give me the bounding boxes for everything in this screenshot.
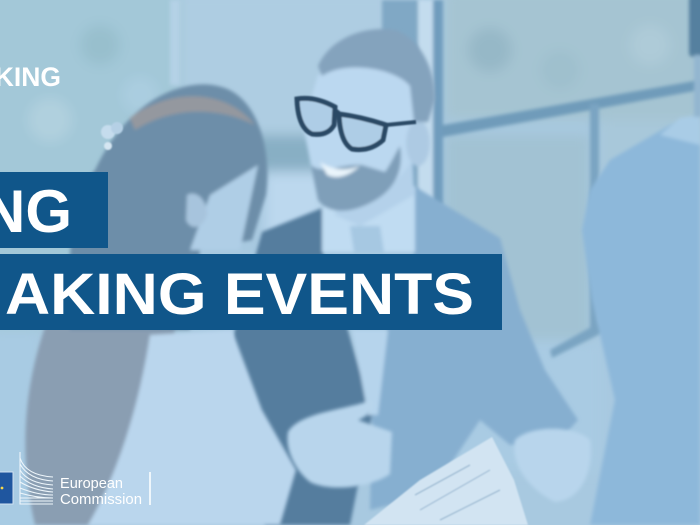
man's light jacket side (370, 186, 578, 510)
logo text: European (60, 476, 123, 492)
woman's long lower hair (25, 260, 175, 525)
ear (406, 120, 430, 166)
document held in hands (364, 437, 528, 525)
glasses (297, 98, 416, 150)
woman's blouse (88, 330, 296, 525)
person: smiling man in suit (232, 29, 591, 525)
logo: Commission building (20, 452, 53, 504)
woman's ear and neck (190, 165, 258, 250)
man's hands (287, 400, 591, 502)
heading block: line one (0, 172, 108, 248)
logo text: Commission (60, 492, 142, 508)
smile (320, 162, 360, 177)
woman's hair (69, 84, 267, 330)
logo text (60, 476, 142, 508)
man's shirt (322, 186, 415, 252)
logo divider (149, 472, 151, 505)
neck and face (335, 150, 414, 226)
person: woman with long hair (25, 84, 296, 525)
beard (311, 146, 401, 211)
man's dark jacket side (232, 208, 372, 525)
heading block: line two: AKING EVENTS (5, 262, 474, 327)
hair (318, 29, 435, 122)
logo: EU flag (0, 472, 13, 504)
hair clip (101, 122, 123, 150)
person: right figure from behind (582, 0, 700, 525)
